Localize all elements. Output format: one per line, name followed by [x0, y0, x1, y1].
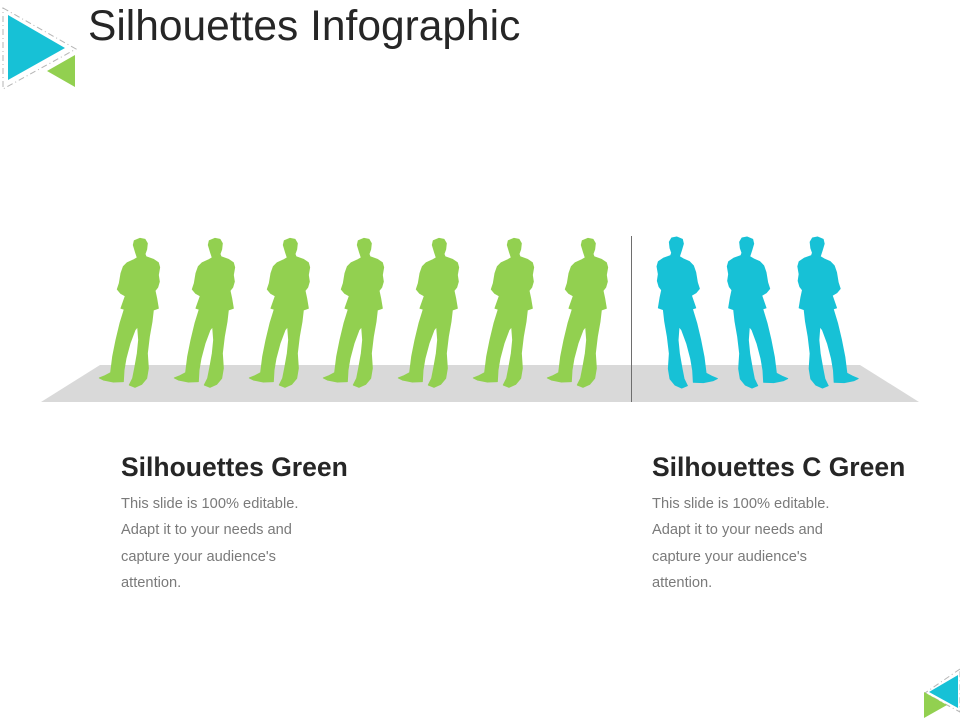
blue silhouette 3 — [798, 237, 858, 388]
title: Silhouettes Infographic — [88, 3, 520, 50]
logo icon: bottom-right triangles — [924, 669, 960, 718]
heading: Silhouettes C Green: Silhouettes C Green — [652, 452, 905, 482]
heading: Silhouettes Green: Silhouettes Green — [121, 452, 348, 482]
text block: blue description — [652, 496, 829, 591]
text block: blue description: This slide is 100% editable. — [652, 496, 829, 512]
text block: green description — [121, 496, 298, 591]
text block: green description: This slide is 100% editable. — [121, 496, 298, 512]
text block: green description: capture your audience's — [121, 549, 276, 565]
text block: green description: attention. — [121, 575, 181, 591]
floor platform — [41, 365, 919, 402]
green silhouette 4 — [323, 238, 384, 387]
green silhouette 5 — [398, 238, 459, 387]
logo icon: top-left triangles — [3, 8, 76, 89]
blue silhouette 2 — [727, 237, 788, 388]
green silhouette 2 — [174, 238, 235, 387]
green silhouette 7 — [547, 238, 608, 387]
text block: blue description: attention. — [652, 575, 712, 591]
text block: blue description: capture your audience's — [652, 549, 807, 565]
blue silhouettes group — [657, 237, 858, 388]
green silhouettes group — [99, 238, 608, 387]
text block: blue description: Adapt it to your needs and — [652, 522, 823, 538]
green silhouette 6 — [473, 238, 534, 387]
blue silhouette 1 — [657, 237, 717, 388]
green silhouette 3 — [249, 238, 310, 387]
green silhouette 1 — [99, 238, 160, 387]
text block: green description: Adapt it to your needs and — [121, 522, 292, 538]
divider line — [630, 236, 632, 402]
